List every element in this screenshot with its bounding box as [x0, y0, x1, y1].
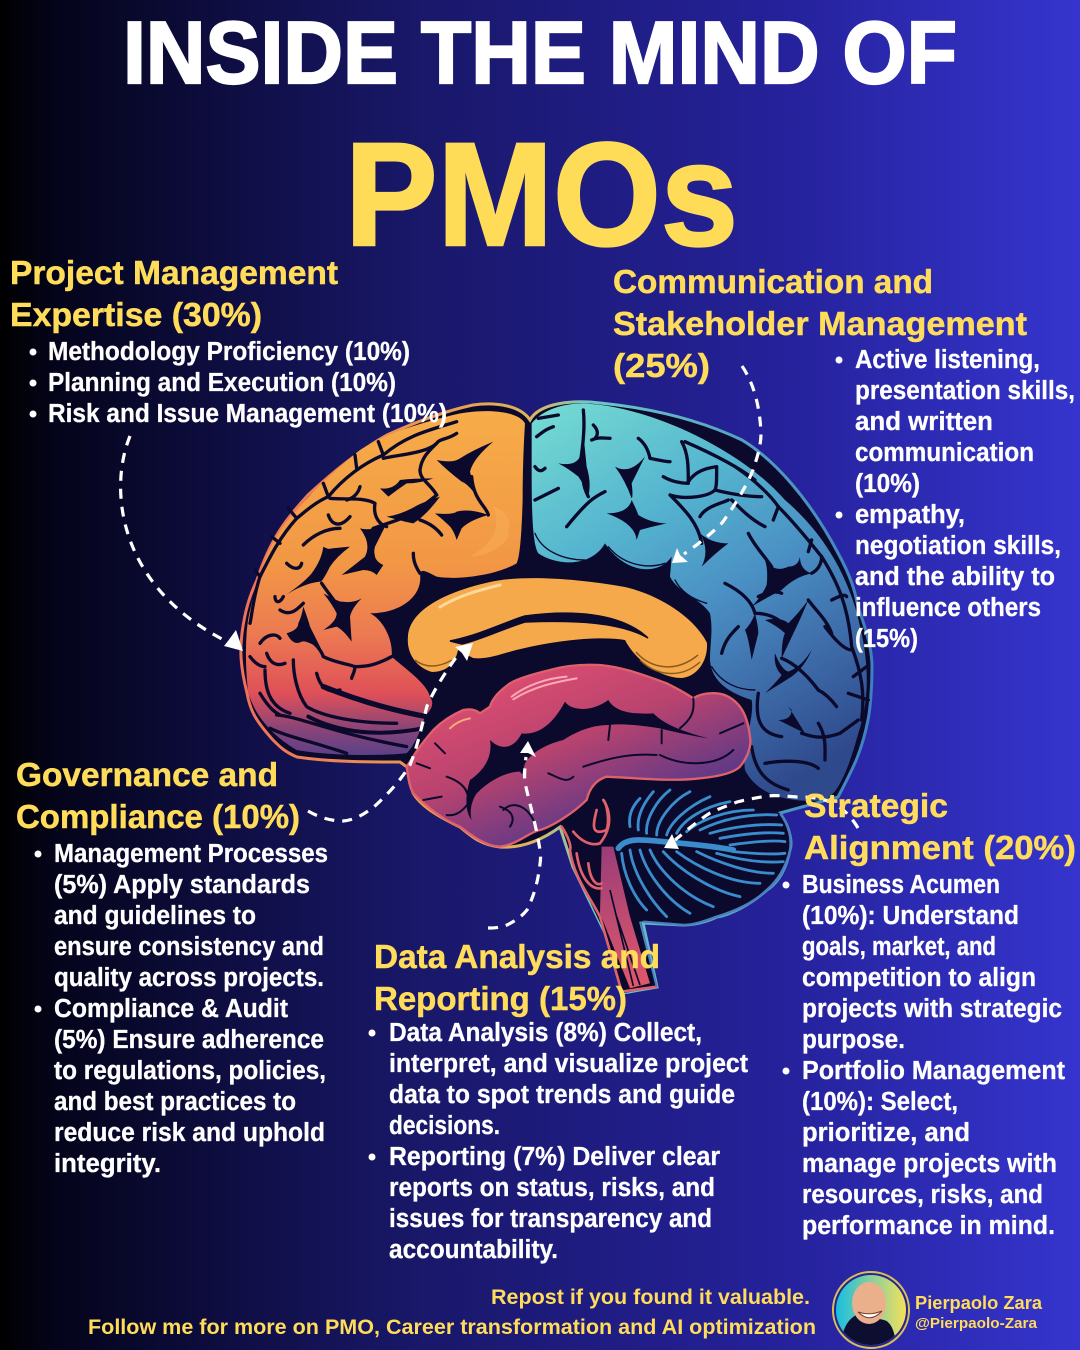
bullet list: resources, risks, and [802, 1181, 1043, 1209]
heading [613, 263, 1027, 384]
bullet list: (10%): Understand [802, 902, 1019, 930]
bullet list: presentation skills, [855, 377, 1075, 405]
panel: strategic alignment [782, 787, 1076, 1240]
brain silhouette [241, 402, 872, 993]
sulci stars [283, 442, 493, 650]
bullet list: quality across projects. [54, 964, 324, 992]
arrow: project management to frontal lobe [121, 436, 243, 651]
arrow: communication to blue lobe [672, 366, 761, 563]
bullet list: issues for transparency and [389, 1205, 712, 1233]
subtitle: PMOs: PMOs [345, 113, 738, 277]
bullet list: (10%) [855, 470, 920, 498]
bullet list: (10%): Select, [802, 1088, 958, 1116]
bullet list: Compliance & Audit [54, 995, 288, 1023]
bullet list: Portfolio Management [802, 1057, 1065, 1085]
limbic lobe: red [407, 665, 750, 847]
bullet list: communication [855, 439, 1034, 467]
bullet list [782, 871, 1065, 1240]
bullet list: performance in mind. [802, 1212, 1055, 1240]
bullet list: Active listening, [855, 346, 1040, 374]
arrow: governance to yellow band [308, 643, 473, 821]
sulci stars [558, 443, 812, 733]
heading [374, 938, 660, 1017]
bullet list: goals, market, and [802, 933, 996, 961]
bullet list: (5%) Apply standards [54, 871, 310, 899]
bullet list: integrity. [54, 1150, 161, 1178]
cerebellum [617, 786, 791, 925]
bullet list: Data Analysis (8%) Collect, [389, 1019, 702, 1047]
parietal and occipital lobes: blue [532, 403, 868, 801]
bullet list: to regulations, policies, [54, 1057, 326, 1085]
brain illustration [241, 402, 872, 993]
footer call to action: Repost if you found it valuable. [491, 1285, 810, 1309]
panel: data analysis and reporting [368, 938, 748, 1264]
avatar portrait [833, 1272, 909, 1350]
bullet list [34, 840, 328, 1178]
heading: Project Management [10, 254, 338, 291]
bullet list: Management Processes [54, 840, 328, 868]
heading: Compliance (10%) [16, 798, 300, 835]
heading [16, 756, 300, 835]
bullet list: Reporting (7%) Deliver clear [389, 1143, 720, 1171]
corpus callosum: yellow band [408, 578, 707, 678]
heading: Expertise (30%) [10, 296, 262, 333]
bullet list: prioritize, and [802, 1119, 970, 1147]
bullet list [30, 338, 447, 428]
bullet list: manage projects with [802, 1150, 1057, 1178]
bullet list: reports on status, risks, and [389, 1174, 715, 1202]
bullet list [368, 1019, 748, 1264]
heading: (25%) [613, 347, 710, 384]
bullet list: projects with strategic [802, 995, 1062, 1023]
bullet list: and the ability to [855, 563, 1055, 591]
bullet list: competition to align [802, 964, 1036, 992]
bullet list: Business Acumen [802, 871, 1000, 899]
bullet list: Risk and Issue Management (10%) [48, 400, 447, 428]
bullet list: ensure consistency and [54, 933, 324, 961]
bullet list: empathy, [855, 501, 965, 529]
inner channel [466, 700, 708, 820]
heading: Alignment (20%) [804, 829, 1076, 866]
bullet list: purpose. [802, 1026, 905, 1054]
heading: Communication and [613, 263, 933, 300]
arrow: data analysis to red lobe [488, 741, 541, 928]
author name and handle [915, 1292, 1043, 1332]
arrow: strategic alignment to cerebellum [664, 796, 858, 849]
bullet list [836, 346, 1075, 653]
panel: governance and compliance [16, 756, 328, 1178]
bullet list: reduce risk and uphold [54, 1119, 325, 1147]
heading: Governance and [16, 756, 278, 793]
brainstem [562, 800, 657, 993]
bullet list: negotiation skills, [855, 532, 1061, 560]
bullet list: (5%) Ensure adherence [54, 1026, 324, 1054]
bullet list: Planning and Execution (10%) [48, 369, 396, 397]
heading [10, 254, 338, 333]
lobe highlights [470, 507, 509, 557]
heading: Reporting (15%) [374, 980, 627, 1017]
title: INSIDE THE MIND OF [123, 3, 957, 102]
panel: project management expertise [10, 254, 447, 428]
bullet list: (15%) [855, 625, 918, 653]
heading [804, 787, 1076, 866]
bullet list: data to spot trends and guide [389, 1081, 735, 1109]
author name and handle: Pierpaolo Zara [915, 1292, 1043, 1313]
frontal lobe: orange [246, 411, 525, 755]
heading: Stakeholder Management [613, 305, 1027, 342]
bullet list: decisions. [389, 1112, 500, 1140]
bullet list: interpret, and visualize project [389, 1050, 748, 1078]
gyri folds [535, 410, 868, 790]
author name and handle: @Pierpaolo-Zara [915, 1315, 1038, 1332]
bullet list: and written [855, 408, 993, 436]
bullet list: and guidelines to [54, 902, 256, 930]
bullet list: and best practices to [54, 1088, 296, 1116]
footer call to action [88, 1285, 816, 1339]
bullet list: accountability. [389, 1236, 558, 1264]
gyri folds [250, 422, 488, 753]
bullet list: Methodology Proficiency (10%) [48, 338, 410, 366]
footer call to action: Follow me for more on PMO, Career transformation and AI optimization [88, 1315, 816, 1339]
panel: communication and stakeholder management [613, 263, 1075, 653]
heading: Strategic [804, 787, 948, 824]
heading: Data Analysis and [374, 938, 660, 975]
bullet list: influence others [855, 594, 1041, 622]
